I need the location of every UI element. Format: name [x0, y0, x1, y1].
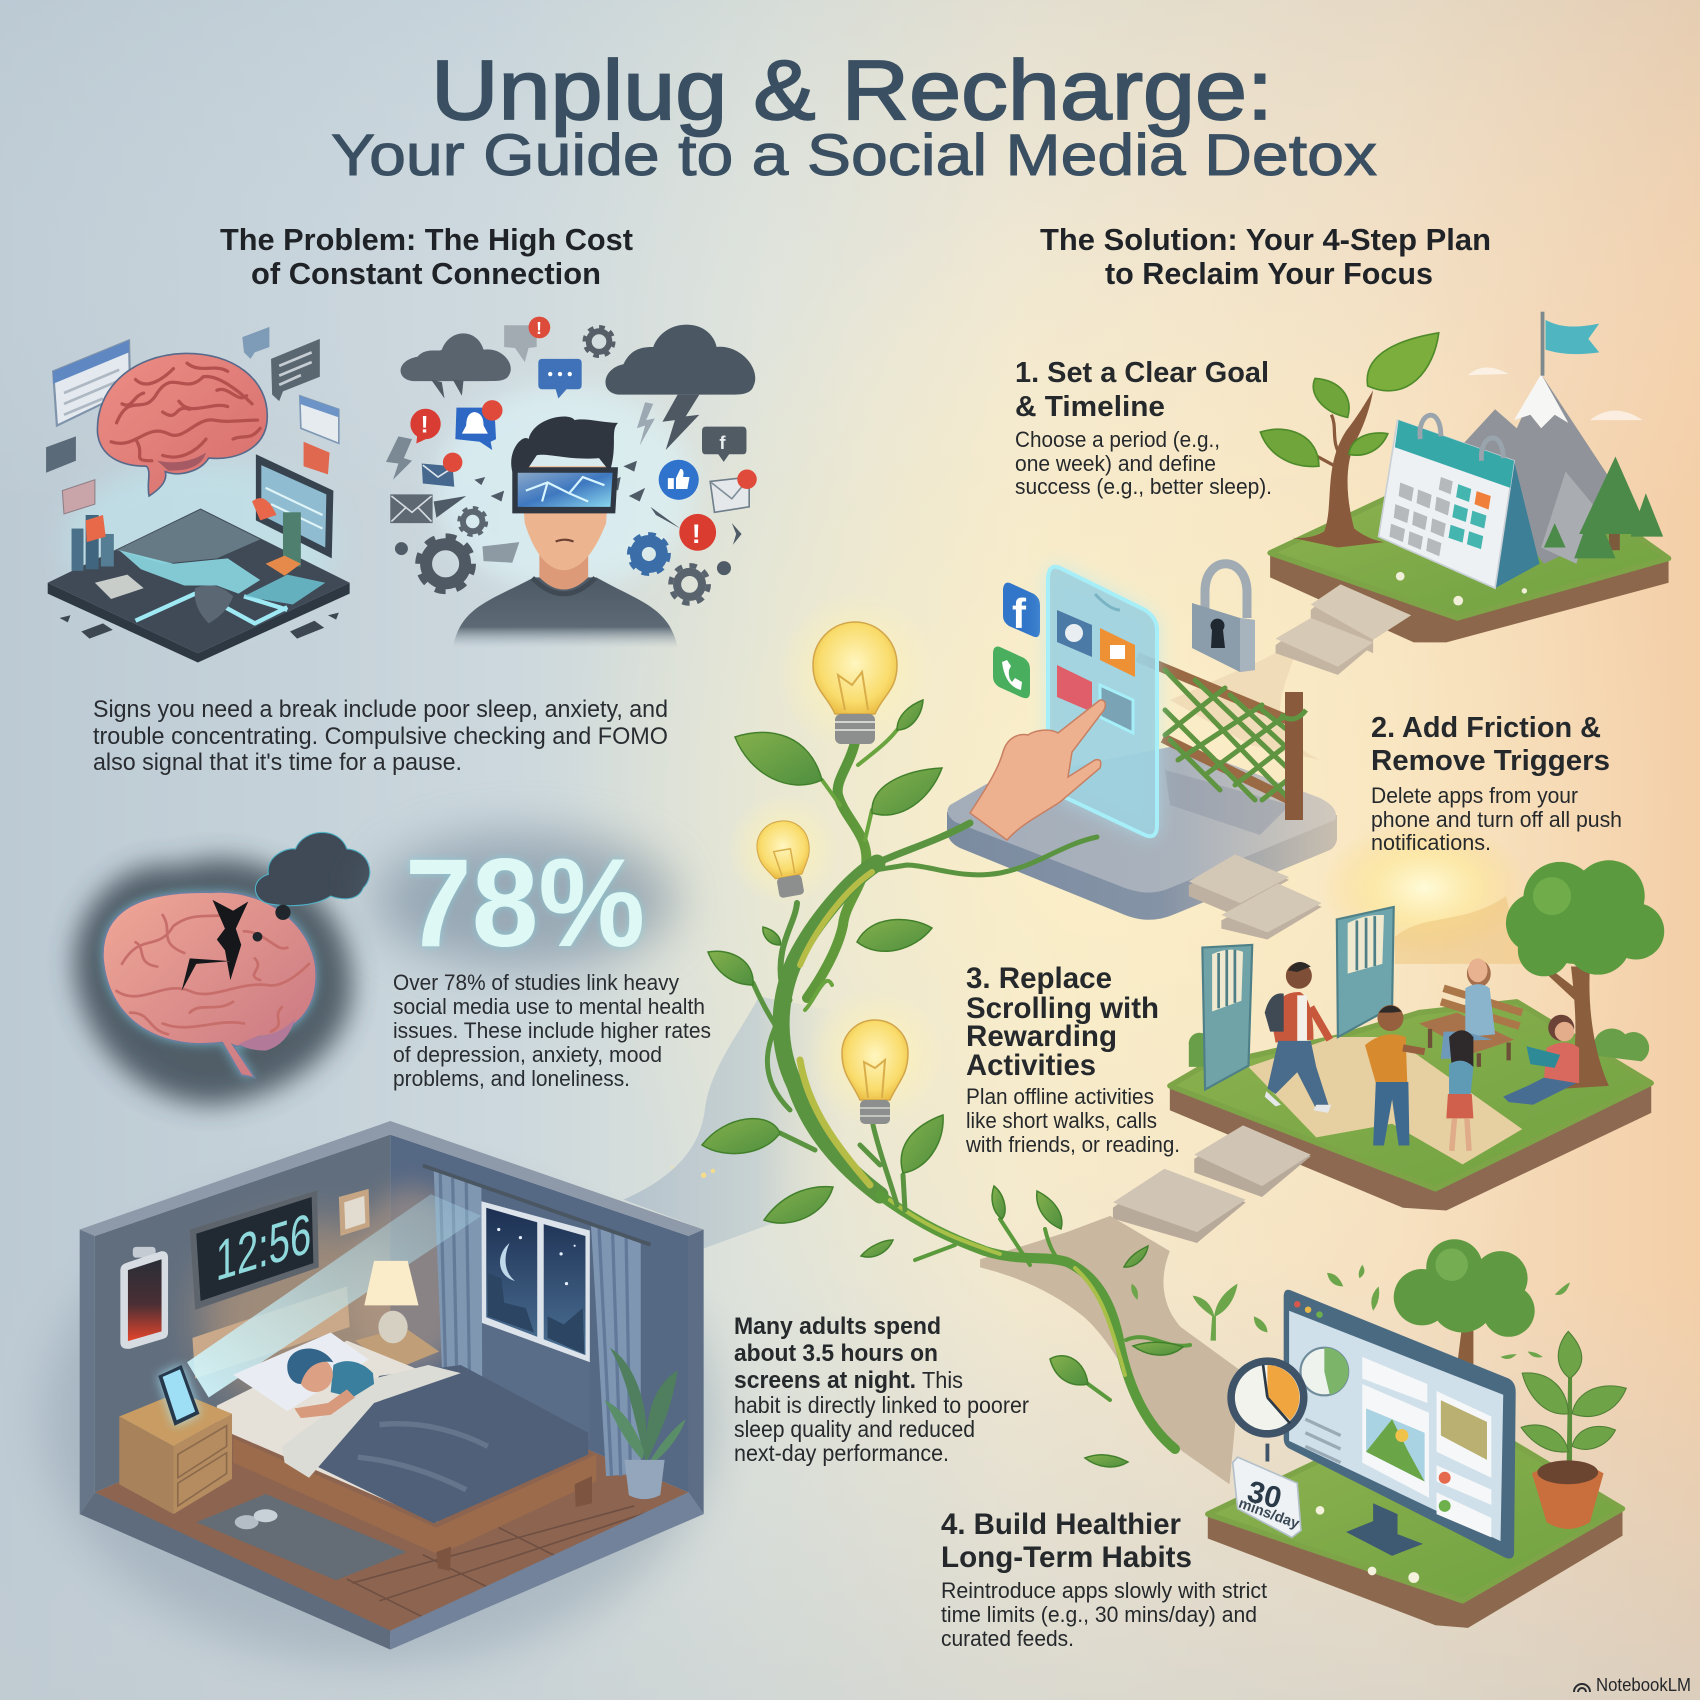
stone slab [947, 745, 1337, 920]
gear large [419, 537, 473, 591]
bulb 2 halo [727, 794, 839, 906]
wall clock 12:56: 12:56 [216, 1202, 311, 1294]
right storm cloud [605, 325, 755, 395]
walking man with backpack [1265, 962, 1331, 1113]
sapling [1260, 333, 1439, 548]
orange chip [252, 498, 276, 520]
light envelope [710, 469, 757, 512]
cracked brain in dark haze [75, 832, 370, 1105]
illustration island 4: monitor, clock, plant [1131, 1239, 1626, 1628]
step 3 text: 3. Replace [966, 962, 1112, 995]
step 3 text: Activities [966, 1049, 1096, 1082]
lightning bolt [662, 395, 699, 450]
left wall [95, 1135, 390, 1492]
30 mins/day sign: mins/day [1236, 1496, 1302, 1533]
text: screens at night: screens at night. [734, 1367, 916, 1394]
dirt base [1208, 1509, 1622, 1628]
tree behind monitor [1394, 1239, 1535, 1387]
gear top [584, 327, 614, 356]
text: signs you need a break: also signal that it's time for a pause. [93, 749, 462, 776]
monitor stand [1346, 1503, 1423, 1556]
sleeping woman [287, 1348, 374, 1418]
text: screens at night: next-day performance. [734, 1440, 949, 1466]
rug and slippers [196, 1494, 407, 1580]
heading: the solution: to Reclaim Your Focus [1105, 256, 1433, 291]
step 4 text: time limits (e.g., 30 mins/day) and [941, 1602, 1257, 1627]
text: screens at night: sleep quality and reduced [734, 1416, 975, 1442]
floating leaves [1131, 1265, 1570, 1359]
text: screens at night: Many adults spend [734, 1313, 941, 1340]
bulb 3 halo [805, 988, 945, 1128]
neck [539, 542, 588, 590]
dirt base [1270, 553, 1669, 642]
stone steps 2 [1189, 854, 1322, 939]
heading: the problem: The Problem: The High Cost [220, 222, 633, 257]
text: 78 percent of studies: issues. These include higher rates [393, 1018, 711, 1043]
sprout [1193, 1284, 1238, 1341]
step 2 text: phone and turn off all push [1371, 807, 1622, 832]
potted plant [604, 1348, 686, 1499]
near nightstand [119, 1392, 232, 1514]
face [520, 466, 610, 570]
pink card [62, 480, 95, 514]
illustration: brain over a cracked digital desk [46, 327, 350, 662]
blue gear [629, 535, 668, 574]
main title: Your Guide to a Social Media Detox [331, 123, 1377, 188]
standing man [1365, 1005, 1425, 1145]
left small bubble [46, 436, 76, 473]
calendar [1379, 415, 1540, 588]
red alert [410, 409, 441, 443]
blue thumbs-up [659, 460, 699, 500]
curtains [423, 1166, 651, 1476]
text: screens at night: This [922, 1367, 963, 1393]
phone app icon [993, 647, 1030, 698]
step 1 text [1015, 357, 1272, 499]
text: signs you need a break: trouble concentrating. Compulsive checking and FOMO [93, 723, 668, 750]
bar chart pillars [72, 515, 114, 571]
shards [395, 461, 742, 575]
flag [1541, 312, 1599, 376]
leaves [702, 700, 1183, 1467]
step 1 text: Choose a period (e.g., [1015, 427, 1220, 452]
step 2 text: Remove Triggers [1371, 745, 1610, 777]
potted plant [1521, 1331, 1626, 1529]
blue chat bubble [538, 359, 582, 398]
sunrise glow [1322, 820, 1528, 956]
monitor [1284, 1290, 1516, 1559]
text: screens at night [734, 1313, 1029, 1466]
stat: 78%: 78% [405, 834, 645, 973]
red alert right [679, 514, 716, 551]
flowers [1316, 1506, 1419, 1583]
step 1 text: success (e.g., better sleep). [1015, 474, 1272, 499]
fence shadow on slab [1165, 770, 1290, 835]
step 2 text [1371, 712, 1622, 855]
grass top [1208, 1435, 1622, 1601]
text: screens at night: habit is directly linked to poorer [734, 1392, 1029, 1418]
thought cloud [255, 832, 370, 906]
text: 78 percent of studies: of depression, anxiety, mood [393, 1042, 662, 1067]
platform [48, 508, 350, 662]
step 2 text: Delete apps from your [1371, 783, 1578, 808]
notification bubble grey [504, 317, 550, 362]
crack [182, 900, 248, 991]
step 2 text: 2. Add Friction & [1371, 712, 1601, 744]
light beam from phone [187, 1194, 481, 1398]
text: signs you need a break: Signs you need a break include poor sleep, anxiety, and [93, 696, 668, 723]
30 mins/day sign: 30 [1244, 1475, 1285, 1515]
red alert: ! [421, 412, 429, 439]
step 2 text: notifications. [1371, 830, 1491, 855]
pointing hand [970, 700, 1105, 840]
illustration island 1: goal and calendar [1260, 312, 1669, 675]
facebook bubble [702, 427, 746, 462]
glass phone [1048, 567, 1157, 836]
bed [217, 1332, 596, 1571]
collar [532, 578, 595, 594]
conifers [1544, 456, 1663, 558]
facebook icon [1003, 583, 1040, 637]
step 1 text: 1. Set a Clear Goal [1015, 357, 1269, 389]
window card left [53, 340, 130, 426]
padlock [1192, 564, 1255, 672]
glowing phone [158, 1365, 199, 1426]
dirt path to step 4 [980, 1216, 1240, 1484]
bulb 3 [842, 1020, 908, 1124]
picture frame [339, 1189, 370, 1236]
step 3 text: with friends, or reading. [965, 1132, 1180, 1157]
step 4 text: 4. Build Healthier [941, 1508, 1181, 1541]
fence with vines [1137, 657, 1306, 820]
illustration island 3: people and open doors [980, 820, 1664, 1484]
small blue bubble [242, 327, 269, 359]
illustration island 2: phone, lock and fence [947, 564, 1337, 920]
step 3 text: Scrolling with [966, 992, 1159, 1025]
dark envelope [390, 494, 433, 523]
step 3 text: Rewarding [966, 1020, 1117, 1053]
sandy path between steps 1 and 2 [1170, 640, 1320, 760]
path swoosh linking the vine and the bedroom [623, 996, 846, 1248]
red alert right: ! [692, 518, 701, 549]
left storm cloud [401, 333, 511, 381]
mini window right [300, 396, 339, 443]
stopwatch [1227, 1357, 1308, 1461]
bench with seated woman [1419, 958, 1522, 1067]
facebook bubble: f [719, 432, 726, 453]
tan path [1248, 1037, 1522, 1164]
window at night [481, 1201, 590, 1441]
step 1 text: one week) and define [1015, 451, 1216, 476]
step 4 text [941, 1508, 1267, 1651]
text: signs you need a break [93, 696, 668, 776]
tree [1506, 860, 1664, 1089]
gear small [459, 508, 486, 535]
mouth [556, 540, 574, 542]
text: 78 percent of studies [393, 970, 711, 1091]
growing vine with light bulbs [702, 592, 1190, 1467]
wall clock 12:56 [190, 1190, 319, 1310]
vine stems [753, 730, 1190, 1449]
step 4 text: Long-Term Habits [941, 1541, 1192, 1574]
lightning left [431, 379, 463, 398]
step 3 text: Plan offline activities [966, 1084, 1154, 1109]
right door [1337, 907, 1394, 1037]
dark chat bubble [271, 339, 320, 401]
monitor [256, 454, 333, 558]
step 4 text: curated feeds. [941, 1626, 1074, 1651]
text: screens at night: about 3.5 hours on [734, 1340, 938, 1367]
hills [1395, 896, 1522, 964]
bedroom illustration [43, 1121, 716, 1663]
step 3 text [965, 962, 1180, 1157]
stone steps 3 [1113, 1125, 1311, 1243]
bulb 2 [753, 817, 817, 901]
main title: Unplug & Recharge: [431, 43, 1273, 137]
text: 78 percent of studies: problems, and loneliness. [393, 1066, 630, 1091]
floating debris [60, 613, 339, 639]
left door [1202, 945, 1252, 1090]
headboard [192, 1286, 350, 1379]
main title [331, 43, 1377, 188]
green tower and orange base [266, 512, 301, 576]
brain [97, 353, 267, 496]
bushes [1189, 1029, 1649, 1067]
heading: the solution [1040, 222, 1491, 291]
NotebookLM watermark: NotebookLM [1596, 1675, 1691, 1695]
hair [511, 417, 618, 472]
stat: 78%: 78% [405, 834, 645, 973]
grass top [1270, 477, 1669, 618]
heading: the problem: of Constant Connection [251, 256, 601, 291]
notification bubble grey: ! [536, 318, 542, 338]
text: 78 percent of studies: social media use to mental health [393, 994, 705, 1019]
goggles [512, 467, 618, 513]
clouds small [1468, 368, 1643, 420]
woman in blue and red [1446, 1030, 1473, 1151]
30 mins/day sign [1233, 1457, 1302, 1537]
reading woman [1503, 1015, 1579, 1105]
right wall [390, 1135, 688, 1492]
far nightstand and lamp [355, 1261, 439, 1370]
flowers [1396, 572, 1527, 606]
shoulders [453, 577, 678, 648]
illustration: overwhelmed person with digital goggles [386, 317, 757, 648]
mountain [1463, 374, 1636, 564]
bulb 1 [813, 622, 897, 744]
room shell [80, 1121, 704, 1650]
step 3 text: like short walks, calls [966, 1108, 1157, 1133]
heading: the problem [220, 222, 633, 291]
floor [95, 1365, 688, 1633]
facebook icon: f [1012, 590, 1027, 637]
bulb 1 halo [775, 592, 935, 752]
grey bolt left [386, 436, 412, 480]
step 1 text: & Timeline [1015, 391, 1165, 423]
heading: the solution: The Solution: Your 4-Step Plan [1040, 222, 1491, 257]
grey card [482, 542, 519, 563]
bell notification [455, 400, 503, 450]
grey gear right [671, 565, 709, 603]
text: 78 percent of studies: Over 78% of studies link heavy [393, 970, 679, 995]
grey bolt [637, 402, 655, 446]
step 4 text: Reintroduce apps slowly with strict [941, 1578, 1267, 1603]
stone steps [1276, 584, 1411, 675]
brain body [103, 892, 316, 1078]
dirt base [1170, 1083, 1651, 1210]
battery icon [120, 1247, 168, 1349]
grass top [1170, 1002, 1651, 1189]
envelope with dot [422, 453, 462, 487]
red card [304, 442, 330, 474]
